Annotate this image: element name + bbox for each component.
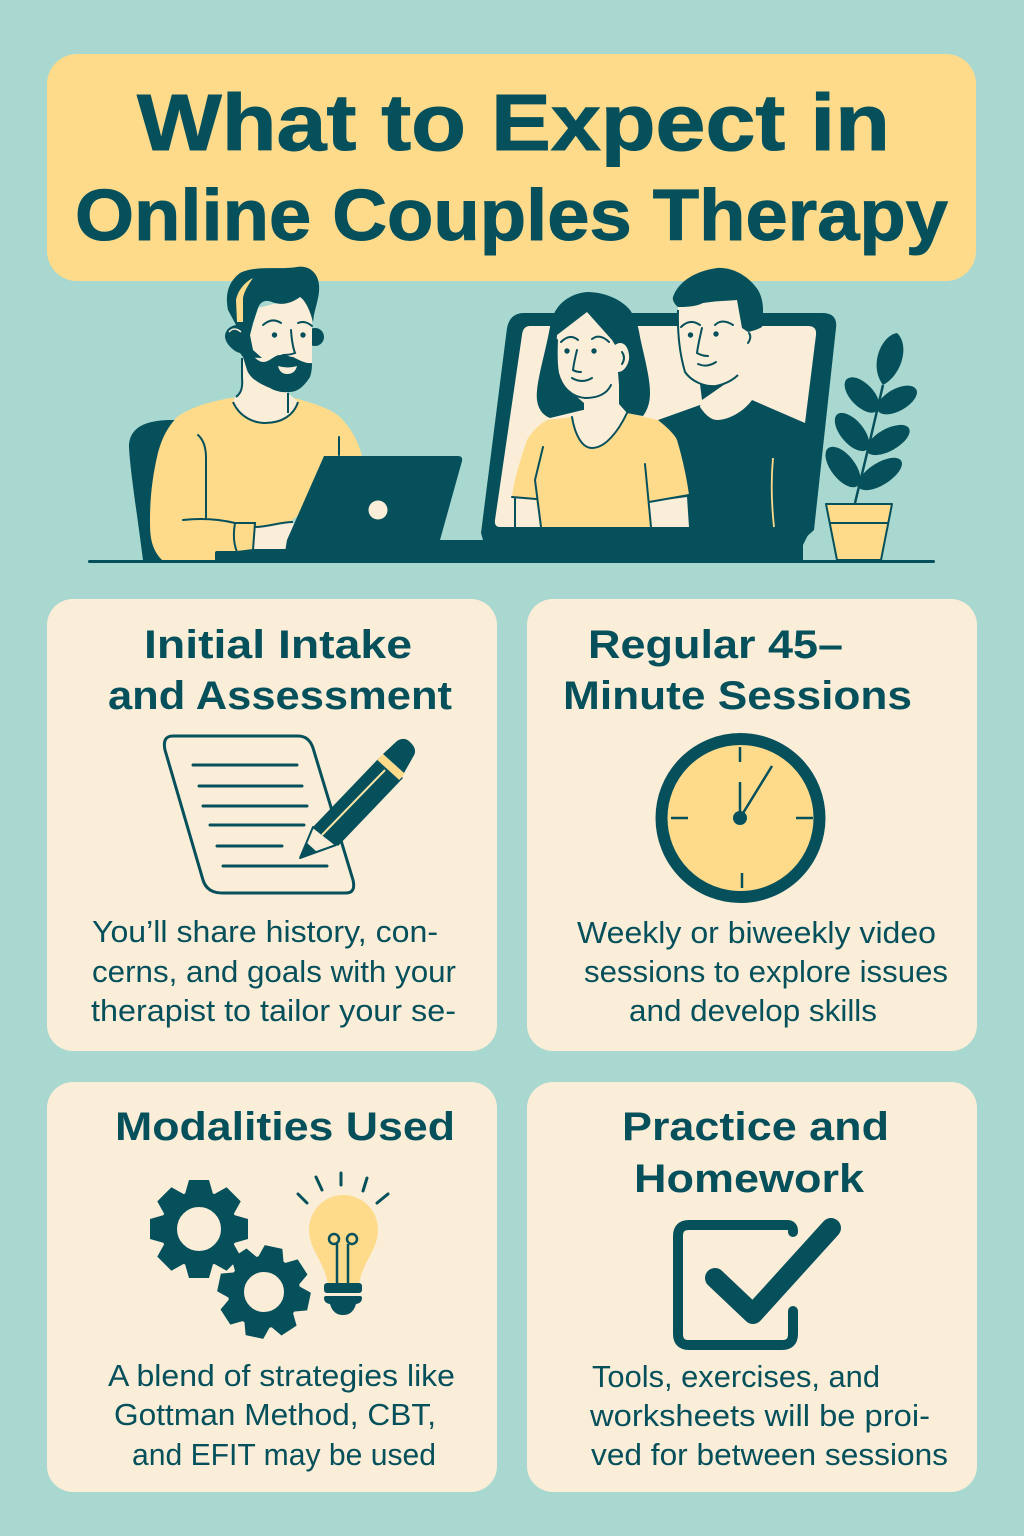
title: What to Expect in <box>137 78 890 167</box>
text: sessions description: Weekly or biweekly video <box>577 915 936 950</box>
text: intake description: You’ll share history, con- <box>92 914 438 949</box>
icon: gears and light bulb <box>150 1173 388 1347</box>
heading: initial intake: Initial Intake <box>144 623 412 667</box>
video call monitor <box>440 268 836 561</box>
desk line <box>88 560 935 563</box>
panel: modalities used <box>47 1082 497 1492</box>
heading: regular sessions: Minute Sessions <box>563 674 912 718</box>
woman on screen <box>512 292 689 527</box>
icon: clock <box>662 739 820 897</box>
title <box>75 78 948 256</box>
heading: initial intake: and Assessment <box>108 674 452 718</box>
text: modalities description: and EFIT may be used <box>132 1437 436 1472</box>
text: modalities description: A blend of strategies like <box>108 1358 455 1393</box>
panel: practice and homework <box>527 1082 977 1492</box>
potted plant <box>819 333 922 560</box>
heading: initial intake <box>108 623 452 718</box>
therapist <box>129 267 362 560</box>
text: modalities description: Gottman Method, CBT, <box>114 1397 436 1432</box>
text: sessions description: sessions to explore issues <box>584 954 948 989</box>
heading: regular sessions: Regular 45– <box>588 623 843 667</box>
title: Online Couples Therapy <box>75 176 948 256</box>
heading: regular sessions <box>563 623 912 718</box>
text: homework description: worksheets will be proi- <box>589 1398 930 1433</box>
text: modalities description <box>108 1358 455 1472</box>
text: sessions description: and develop skills <box>629 993 877 1028</box>
panel: initial intake and assessment <box>47 599 497 1051</box>
heading: practice and homework <box>622 1105 889 1201</box>
illustration: online therapy session <box>88 267 935 563</box>
icon: document and pencil <box>164 736 415 893</box>
man on screen <box>650 268 820 561</box>
text: intake description: therapist to tailor your se- <box>91 993 456 1028</box>
text: intake description: cerns, and goals with your <box>92 954 456 989</box>
title banner <box>47 54 976 281</box>
text: homework description: Tools, exercises, and <box>592 1359 880 1394</box>
panel: regular sessions <box>527 599 977 1051</box>
text: sessions description <box>577 915 948 1028</box>
heading: practice and homework: Homework <box>634 1157 865 1201</box>
text: intake description <box>91 914 456 1028</box>
laptop <box>215 456 462 561</box>
heading: practice and homework: Practice and <box>622 1105 889 1149</box>
text: homework description: ved for between sessions <box>591 1437 948 1472</box>
icon: check box <box>678 1225 831 1345</box>
heading: modalities used: Modalities Used <box>115 1105 455 1149</box>
text: homework description <box>589 1359 948 1472</box>
